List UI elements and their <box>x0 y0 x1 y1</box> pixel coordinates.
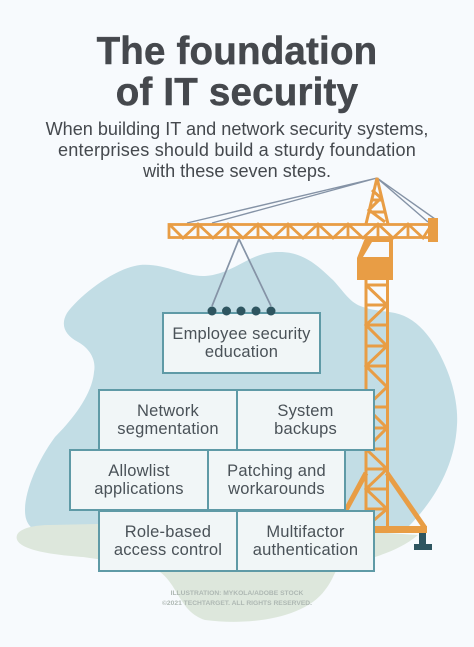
box: role-based access control: Role-based <box>125 523 211 541</box>
base legs <box>346 473 427 530</box>
box: multifactor authentication: authentication <box>253 541 358 559</box>
intro text: with these seven steps. <box>143 161 331 181</box>
box: system backups <box>236 389 375 451</box>
green ground blob <box>17 524 418 622</box>
box: role-based access control <box>98 510 238 572</box>
intro text: enterprises should build a sturdy foundation <box>58 140 416 160</box>
box: multifactor authentication: Multifactor <box>266 523 345 541</box>
tower <box>366 280 388 527</box>
box: network segmentation: Network <box>137 402 199 420</box>
box: multifactor authentication <box>236 510 375 572</box>
box: employee security education: Employee security <box>172 325 311 343</box>
box: system backups: backups <box>274 420 337 438</box>
blue blob <box>25 252 457 530</box>
counterweight <box>428 218 438 242</box>
title: of IT security <box>116 71 358 114</box>
intro text <box>46 119 428 181</box>
box: role-based access control: access control <box>114 541 222 559</box>
box: system backups: System <box>277 402 334 420</box>
box: patching and workarounds <box>207 449 346 511</box>
credit <box>162 590 312 606</box>
credit: ILLUSTRATION: MYKOLA/ADOBE STOCK <box>171 590 303 597</box>
box: employee security education: education <box>205 343 278 361</box>
title: The foundation <box>97 30 377 73</box>
box: network segmentation: segmentation <box>117 420 219 438</box>
mast top <box>366 178 388 224</box>
hoist connector dots <box>208 306 276 316</box>
box: patching and workarounds: workarounds <box>228 480 325 498</box>
title <box>96 30 377 114</box>
box: employee security education <box>162 312 321 374</box>
box: allowlist applications <box>69 449 209 511</box>
box: allowlist applications: Allowlist <box>108 462 170 480</box>
intro text: When building IT and network security systems, <box>46 119 428 139</box>
crane <box>169 178 438 550</box>
cables <box>187 178 435 306</box>
cab <box>357 238 393 280</box>
foot <box>414 533 432 550</box>
jib <box>169 224 432 238</box>
credit: ©2021 TECHTARGET. ALL RIGHTS RESERVED. <box>162 600 312 606</box>
box: network segmentation <box>98 389 238 451</box>
box: patching and workarounds: Patching and <box>227 462 326 480</box>
box: allowlist applications: applications <box>94 480 184 498</box>
